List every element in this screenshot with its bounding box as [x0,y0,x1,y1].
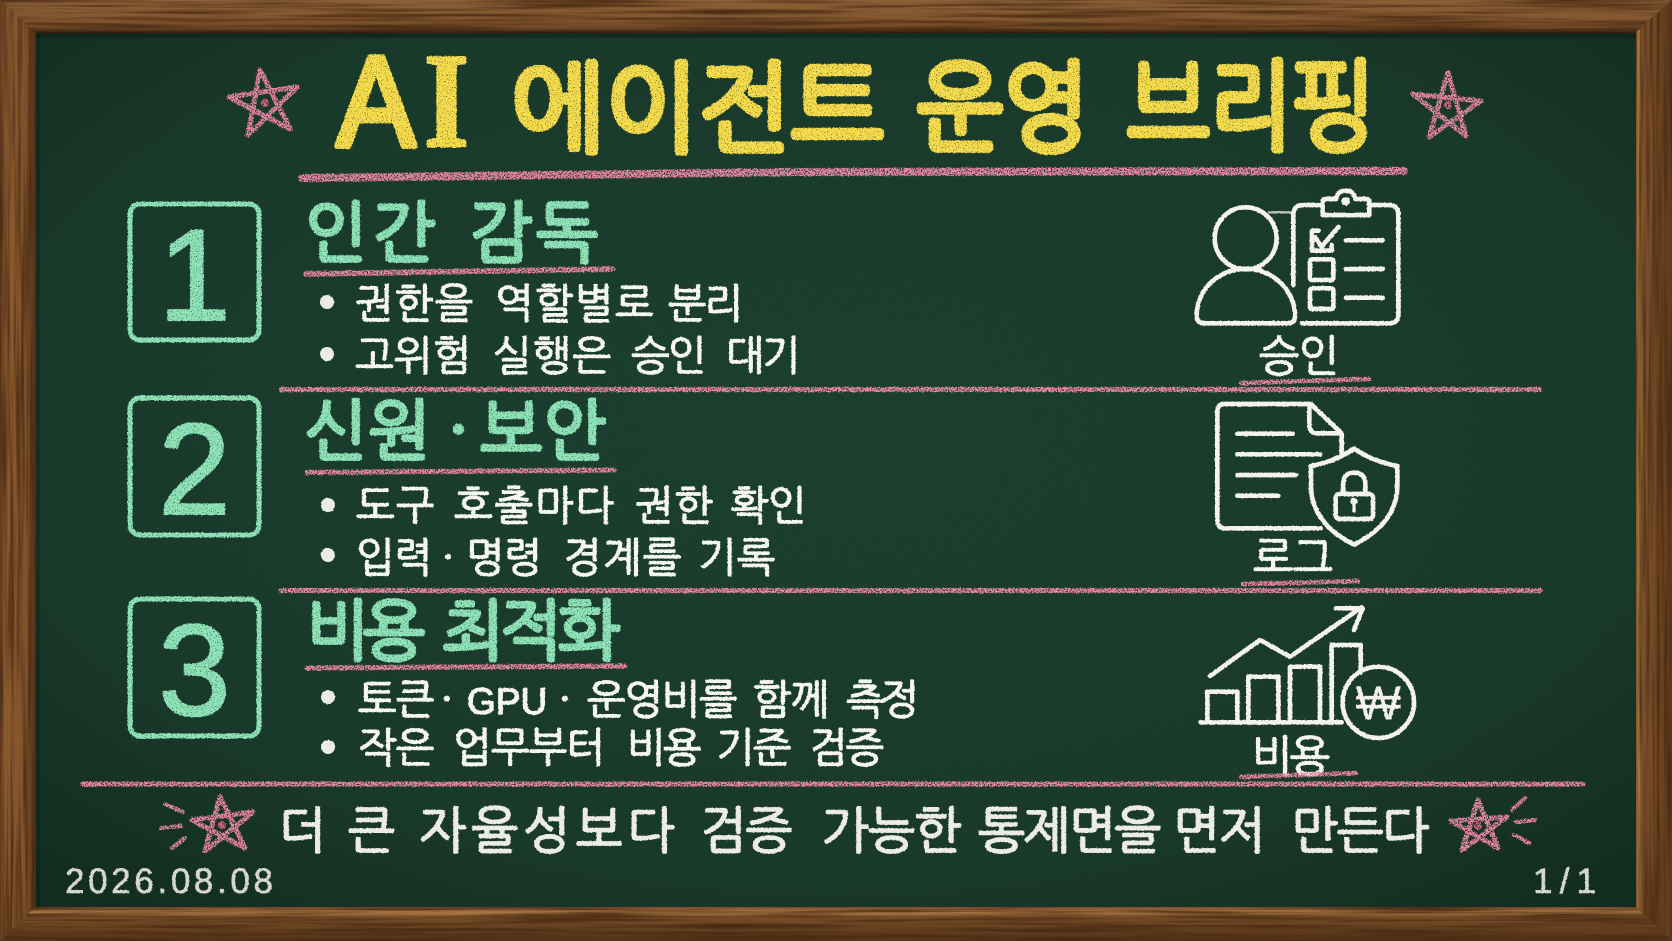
label underline: approval [1241,379,1369,383]
title: 브리핑 [1127,58,1375,156]
title: A [337,31,416,174]
section 2: trust and security [130,396,806,578]
bullet list 3: 운영비를 [587,679,737,720]
heading underline 3 [307,666,625,668]
heading 3: 최적화 [442,598,619,664]
bullet list 2: 기록 [698,537,776,578]
heading 2: · [449,398,468,464]
icon: right star [1413,73,1481,137]
heading 1 [305,200,602,266]
bullet list 1: 대기 [726,335,798,376]
bullet list 1: 분리 [668,283,741,324]
bullet list 2: 명령 [466,537,541,578]
title underline [302,171,1404,178]
bullet list 2: 권한 [635,485,714,526]
bullet list 3: 기준 [716,727,791,768]
icon: bottom left star with rays [161,797,253,851]
bullet list 3: 토큰 [358,679,434,720]
bullet list 3 [321,679,915,768]
bullet list 1 [320,283,798,376]
section dividers [83,390,1583,784]
heading 1: 감독 [470,200,602,266]
bullet list 3: GPU [467,681,547,722]
icon: bottom right star with rays [1451,798,1535,850]
number box 3 [130,597,259,743]
conclusion text: 검증 [700,806,791,856]
number box 2: 2 [158,396,231,542]
bullet list 2: 도구 [356,485,436,526]
icon: cost bar chart with won coin [1201,607,1414,738]
bullet list 2: 호출마다 [454,485,616,526]
bullet list 2: 경계를 [563,537,683,578]
icon: left star [229,70,297,135]
heading 3: 비용 [307,598,424,664]
bullet list 2 [321,485,806,578]
conclusion text: 통제면을 [978,806,1160,856]
title: 에이전트 [512,60,884,158]
bullet list 1: 고위험 [355,335,472,376]
label: log: 로그 [1253,537,1333,580]
title [337,27,1375,176]
conclusion text: 자율성보다 [419,806,680,856]
conclusion with stars [161,797,1535,856]
number box 1 [130,202,259,348]
conclusion text: 면저 [1173,806,1264,856]
title stars [229,70,1481,137]
conclusion text: 더 [279,806,326,856]
bullet list 3: 작은 [358,727,434,768]
bullet list 1: 실행은 [493,335,612,376]
icon: person with approval clipboard [1197,191,1398,323]
bullet list 3: 검증 [809,727,884,768]
heading 1: 인간 [305,200,441,266]
page number: 1/1 [1533,862,1596,901]
heading underline 2 [307,470,614,472]
bullet list 3: 측정 [846,679,915,720]
bullet list 1: 역할별로 [495,283,655,324]
section 3: cost optimisation [130,597,915,768]
bullet list 3: 업무부터 [453,727,604,768]
title: 운영 [917,59,1089,157]
conclusion text: 큰 [348,806,395,856]
bullet list 1: 권한을 [355,283,474,324]
label underline: log [1243,581,1358,584]
number box 1: 1 [158,202,231,348]
label: approval: 승인 [1259,335,1339,378]
conclusion text [279,806,1429,856]
icon: log document with shield lock [1217,404,1397,545]
bullet list 2: 확인 [730,485,806,526]
label underline: cost [1241,773,1356,777]
icon: cost bar chart with won coin: ₩ [1356,676,1402,730]
bullet list 1: 승인 [631,335,705,376]
bullet list 3: · [441,679,453,720]
label: cost: 비용 [1252,735,1330,778]
bullet list 2: · [442,537,454,578]
title: I [424,27,469,176]
number box 2 [130,396,259,542]
heading 2 [305,398,607,464]
section 1: human oversight [130,200,798,376]
number box 3: 3 [158,597,231,743]
bullet list 3: 함께 [753,679,829,720]
conclusion text: 만든다 [1291,806,1429,856]
heading 2: 신원 [305,398,432,464]
heading 3 [307,598,619,664]
heading underline 1 [306,269,612,274]
bullet list 3: 비용 [627,727,701,768]
date: 2026.08.08 [65,862,273,901]
heading 2: 보안 [480,398,607,464]
conclusion text: 가능한 [822,806,961,856]
bullet list 3: · [559,679,571,720]
bullet list 2: 입력 [356,537,432,578]
